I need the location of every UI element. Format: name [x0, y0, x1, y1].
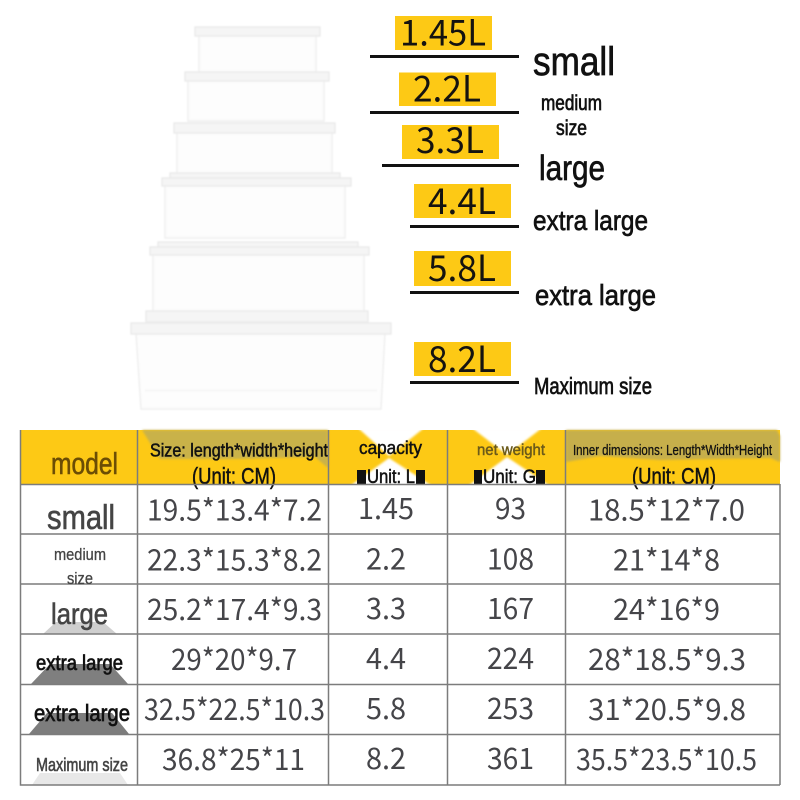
capacity label 8.2L maximum size	[410, 331, 652, 399]
row: extra large 4.4L: 4.4	[366, 636, 406, 678]
row: medium size	[54, 536, 720, 588]
row: medium size: 108	[487, 536, 534, 578]
row: extra large 4.4L: 29*20*9.7	[171, 637, 297, 679]
capacity label 3.3L large: large	[539, 149, 605, 188]
row: small: 18.5*12*7.0	[588, 488, 745, 530]
row: extra large 4.4L: extra large	[36, 652, 123, 675]
specification table	[20, 428, 780, 785]
row: maximum size: 36.8*25*11	[162, 737, 305, 779]
capacity label 5.8L extra large: 5.8L	[428, 240, 496, 292]
row: large: large	[51, 598, 108, 631]
header: capacity: Unit: L	[367, 467, 415, 488]
capacity label 4.4L extra large: 4.4L	[428, 173, 496, 225]
row: maximum size	[36, 736, 757, 779]
row: medium size: 2.2	[366, 536, 406, 578]
row: large: 25.2*17.4*9.3	[147, 587, 322, 629]
icon: container 8.2L	[131, 311, 391, 409]
icon: container 2.2L	[185, 72, 329, 121]
row: large: 3.3	[366, 586, 406, 628]
icon: container 5.8L	[150, 242, 369, 313]
row: large: 167	[487, 586, 534, 628]
table grid	[20, 430, 780, 785]
icon: container 3.3L	[174, 123, 335, 180]
row: maximum size: 35.5*23.5*10.5	[576, 737, 757, 779]
row: medium size: size	[67, 569, 93, 588]
row: maximum size: Maximum size	[36, 755, 128, 775]
icon: container 1.45L	[195, 27, 320, 72]
row: extra large 4.4L: 28*18.5*9.3	[588, 637, 746, 679]
row: large: 24*16*9	[613, 587, 720, 629]
row: small: 19.5*13.4*7.2	[147, 488, 322, 530]
header: capacity	[357, 438, 425, 488]
header: inner dimensions: (Unit: CM)	[632, 463, 716, 489]
row: maximum size: 8.2	[366, 736, 406, 778]
header: size	[150, 440, 328, 489]
header: net weight: Unit: G	[483, 467, 536, 488]
header: size: Size: length*width*height	[150, 440, 328, 460]
row: extra large 4.4L	[36, 636, 746, 679]
row: extra large 5.8L: 31*20.5*9.8	[588, 687, 746, 729]
row: large	[51, 586, 720, 631]
first column row shading	[29, 622, 129, 785]
header: size: (Unit: CM)	[192, 463, 276, 489]
capacity label 4.4L extra large: extra large	[533, 205, 648, 236]
row: medium size: 21*14*8	[613, 538, 720, 580]
header: net weight	[474, 442, 546, 488]
capacity label 2.2L medium size: medium	[541, 92, 602, 115]
header: model: model	[51, 446, 118, 481]
row: extra large 5.8L: 32.5*22.5*10.3	[144, 687, 325, 729]
icon: container 4.4L	[162, 173, 351, 238]
header: inner dimensions	[573, 442, 773, 489]
header: capacity: capacity	[359, 438, 422, 458]
row: extra large 5.8L: 5.8	[366, 686, 406, 728]
row: extra large 5.8L: extra large	[34, 700, 130, 726]
capacity label 1.45L small: small	[533, 40, 615, 84]
row: extra large 4.4L: 224	[487, 636, 534, 678]
capacity label 1.45L small	[370, 4, 615, 84]
capacity label 8.2L maximum size: 8.2L	[428, 331, 496, 383]
capacity label 5.8L extra large: extra large	[535, 280, 656, 312]
capacity label 3.3L large: 3.3L	[416, 112, 484, 164]
row: extra large 5.8L: 253	[487, 686, 534, 728]
capacity label 3.3L large	[382, 112, 605, 188]
stacked transparent containers illustration	[131, 27, 391, 409]
row: medium size: 22.3*15.3*8.2	[147, 538, 322, 580]
capacity label 1.45L small: 1.45L	[400, 4, 486, 56]
capacity label 2.2L medium size: 2.2L	[413, 60, 481, 112]
row: medium size: medium	[54, 545, 106, 564]
row: small	[47, 486, 745, 537]
row: small: small	[47, 499, 115, 537]
capacity label 2.2L medium size: size	[556, 117, 587, 140]
capacity label 5.8L extra large	[410, 240, 656, 312]
header: net weight: net weight	[477, 442, 546, 459]
capacity label 2.2L medium size	[370, 60, 602, 140]
row: extra large 5.8L	[34, 686, 746, 729]
row: maximum size: 361	[487, 736, 534, 778]
row: small: 1.45	[358, 486, 414, 528]
row: small: 93	[495, 486, 526, 528]
capacity label 4.4L extra large	[410, 173, 648, 236]
capacity label 8.2L maximum size: Maximum size	[534, 373, 652, 399]
table header row	[20, 428, 780, 489]
